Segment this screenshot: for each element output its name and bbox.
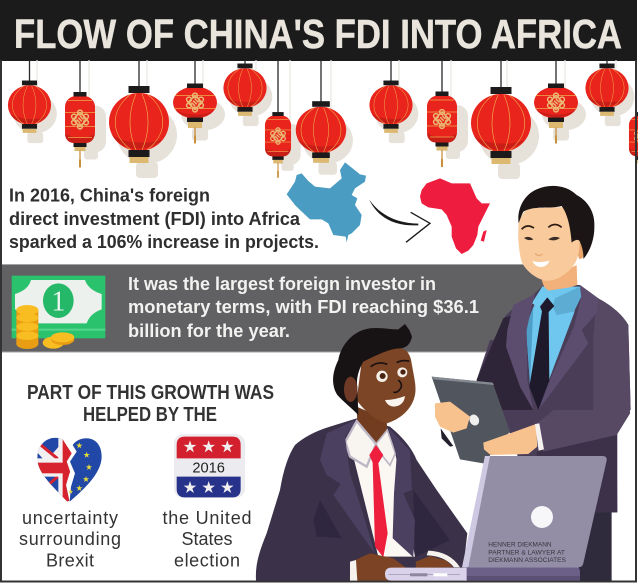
lantern 6 xyxy=(265,112,301,178)
lower jacket xyxy=(477,340,630,512)
lantern 2 xyxy=(65,92,106,168)
hair xyxy=(333,324,412,415)
lapels xyxy=(506,294,535,410)
neck xyxy=(542,265,577,291)
heading: part of this growth: PART OF THIS GROWTH WAS xyxy=(27,382,274,404)
caption: US election: election xyxy=(174,550,240,570)
eyebrows xyxy=(371,361,409,367)
collar xyxy=(345,421,376,467)
lantern 4 xyxy=(173,84,225,144)
lantern 9 xyxy=(427,92,468,167)
laptop label xyxy=(488,543,566,564)
trousers xyxy=(578,507,612,581)
lantern 11 xyxy=(534,84,586,144)
laptop xyxy=(385,456,607,581)
band text: It was the largest foreign investor in xyxy=(128,273,436,294)
laptop base xyxy=(463,567,580,581)
lapels xyxy=(320,419,375,554)
band text: billion for the year. xyxy=(128,320,290,341)
seated man xyxy=(256,324,467,581)
shirt xyxy=(350,422,415,557)
map: Africa xyxy=(420,178,490,254)
blue shirt xyxy=(526,287,581,385)
hands and cuffs xyxy=(354,553,407,581)
band text: monetary terms, with FDI reaching $36.1 xyxy=(128,296,479,317)
collar xyxy=(532,286,555,307)
arrow from China to Africa xyxy=(369,199,430,242)
hanging red lanterns xyxy=(8,60,638,179)
tablet xyxy=(432,377,510,463)
jacket xyxy=(256,418,467,581)
icon: broken Brexit heart xyxy=(35,435,102,503)
nose xyxy=(535,253,543,256)
nose xyxy=(393,380,401,392)
standing man with tablet xyxy=(432,186,631,581)
icon: money and coins: 1 xyxy=(51,287,65,318)
lower jacket shadow xyxy=(537,433,617,512)
eyes xyxy=(524,237,533,240)
hair xyxy=(518,186,594,259)
laptop label: HENNER DIEKMANN xyxy=(488,543,552,549)
heading: part of this growth: HELPED BY THE xyxy=(83,404,217,426)
caption: US election: the United xyxy=(162,508,252,528)
caption: Brexit: surrounding xyxy=(19,529,121,549)
band text xyxy=(128,273,479,341)
ear xyxy=(344,377,357,402)
lantern 3 xyxy=(109,86,177,178)
head xyxy=(357,348,416,423)
caption: Brexit xyxy=(19,508,121,570)
lantern 5 xyxy=(223,64,272,126)
caption: US election xyxy=(162,508,252,570)
laptop label: PARTNER & LAWYER AT xyxy=(488,550,565,556)
left hand xyxy=(435,402,470,433)
intro text: In 2016, China's foreign xyxy=(9,184,210,206)
tie xyxy=(529,297,554,410)
jacket folds xyxy=(313,490,450,557)
lantern 1 xyxy=(8,81,57,143)
eyes xyxy=(376,371,388,382)
grey band xyxy=(2,264,550,352)
intro text xyxy=(9,184,319,252)
far arm xyxy=(441,428,453,447)
face xyxy=(518,207,580,281)
ear xyxy=(573,233,591,259)
lantern 13 partial xyxy=(629,112,638,178)
caption: US election: States xyxy=(182,529,232,549)
heading: part of this growth xyxy=(27,382,274,426)
eyebrows xyxy=(522,224,562,229)
icon: money and coins xyxy=(12,276,105,349)
lantern 8 xyxy=(369,81,418,143)
jacket shoulders xyxy=(477,285,631,410)
intro text: sparked a 106% increase in projects. xyxy=(9,231,319,252)
icon: 2016 election badge xyxy=(174,434,245,498)
caption: Brexit: Brexit xyxy=(46,550,94,570)
intro text: direct investment (FDI) into Africa xyxy=(9,208,301,229)
tie xyxy=(369,445,388,557)
lantern 12 xyxy=(585,64,634,126)
map: China xyxy=(287,162,366,242)
sleeve xyxy=(537,340,630,452)
neck xyxy=(357,407,387,444)
right hand xyxy=(483,424,537,455)
mouth xyxy=(385,396,405,407)
icon: 2016 election badge: 2016 xyxy=(192,461,225,477)
caption: Brexit: uncertainty xyxy=(22,508,118,528)
lantern 7 xyxy=(296,101,353,175)
mouth xyxy=(532,261,550,267)
lantern 10 xyxy=(471,87,539,179)
laptop label: DIEKMANN ASSOCIATES xyxy=(488,558,566,564)
